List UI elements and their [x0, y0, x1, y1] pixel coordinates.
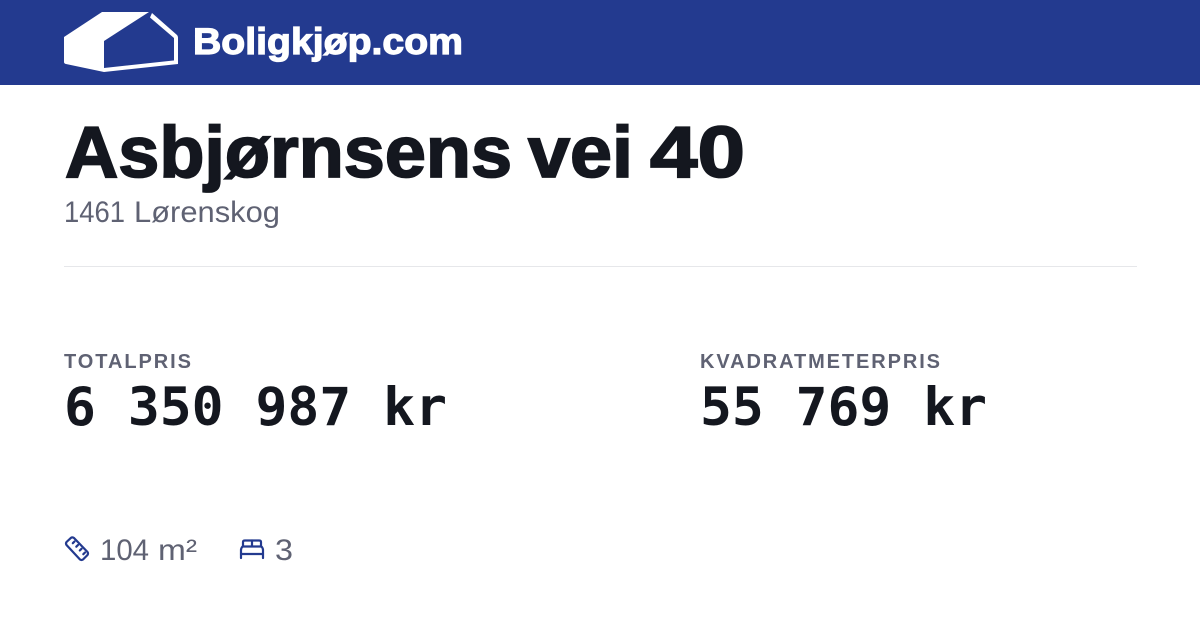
area value: m² [158, 534, 197, 567]
title: Asbjørnsens [65, 113, 512, 193]
value: price per square metre: 55 769 kr [700, 377, 987, 438]
title: 40 [650, 113, 745, 193]
icon: ruler [66, 537, 88, 560]
bedroom count: 3 [275, 534, 293, 567]
title [65, 113, 745, 193]
brand name: Boligkjøp.com [193, 21, 463, 62]
stat: total price [64, 351, 447, 438]
value: total price: 6 350 987 kr [64, 377, 447, 438]
area value [100, 534, 197, 567]
subtitle: postal address [64, 196, 280, 229]
icon: bed [241, 540, 263, 558]
title: vei [528, 113, 633, 193]
subtitle: postal address: Lørenskog [134, 196, 280, 229]
area value: 104 [100, 534, 149, 567]
subtitle: postal address: 1461 [64, 196, 125, 229]
label: price per square metre: KVADRATMETERPRIS [700, 351, 940, 373]
divider [64, 266, 1137, 267]
icon: house logo [64, 12, 178, 72]
header bar [0, 0, 1200, 85]
stat: price per square metre [700, 351, 987, 438]
label: total price: TOTALPRIS [64, 351, 191, 373]
